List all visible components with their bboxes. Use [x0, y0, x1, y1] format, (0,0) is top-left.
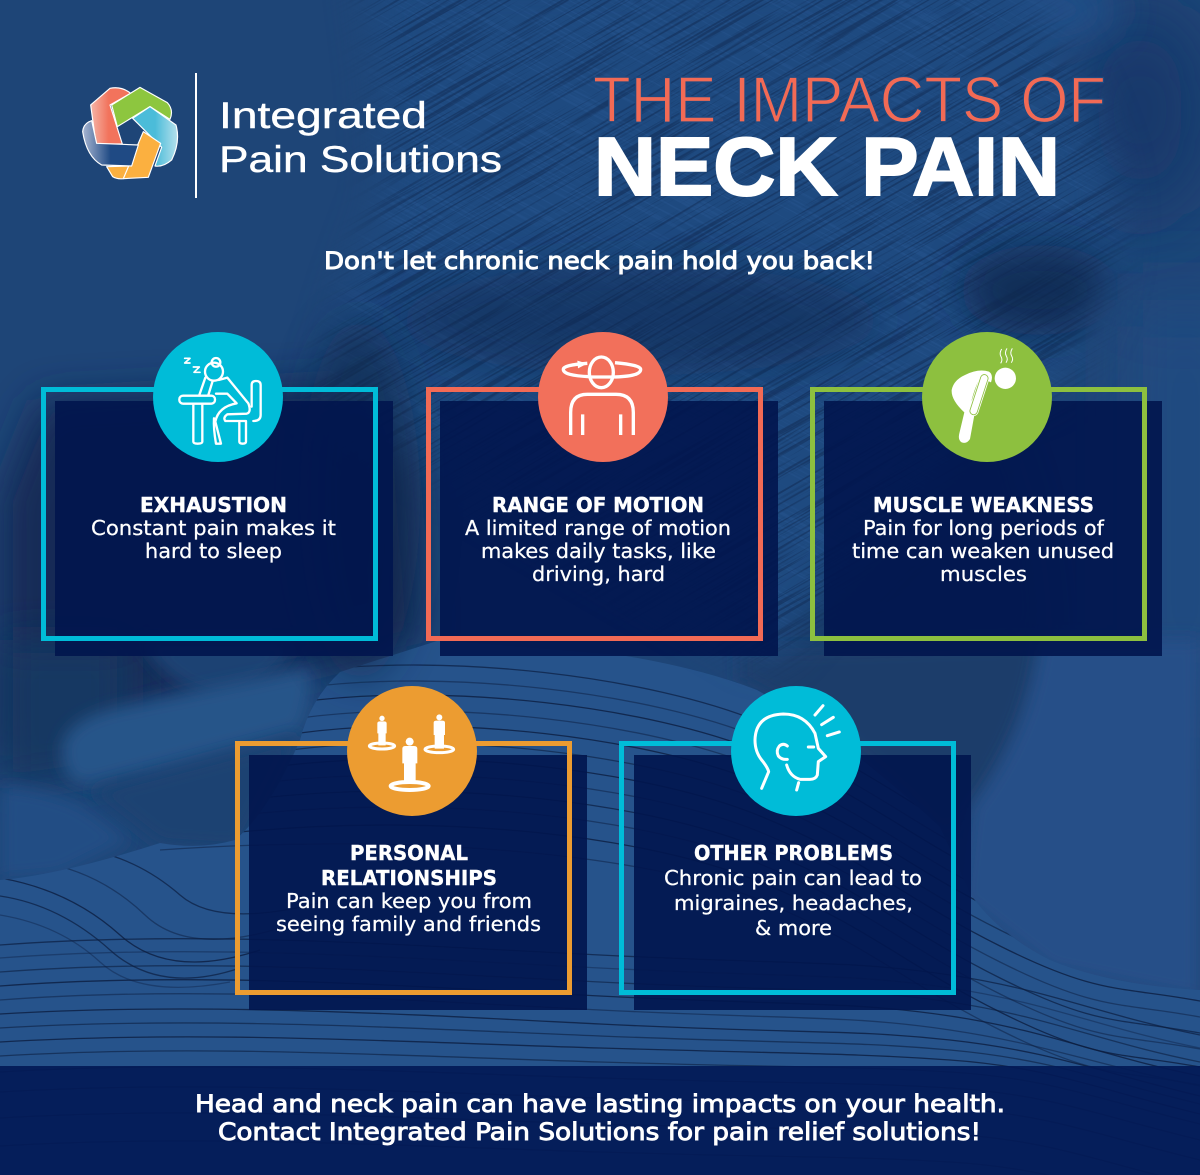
shirt — [0, 641, 1200, 1066]
icon: head with pain lines — [755, 706, 839, 790]
exhaustion text: hard to sleep — [145, 539, 282, 563]
muscle weakness text — [852, 493, 1114, 586]
icon: three people on rings — [369, 714, 454, 790]
panel: other problems — [622, 686, 971, 1010]
other problems text: & more — [755, 916, 832, 940]
title: NECK PAIN — [594, 120, 1060, 213]
logo wordmark — [219, 95, 502, 180]
personal relationships text — [276, 841, 541, 936]
icon: person asleep at desk — [179, 358, 261, 444]
other problems text — [664, 841, 922, 940]
range of motion text: driving, hard — [532, 562, 665, 586]
other problems text: OTHER PROBLEMS — [694, 841, 893, 865]
panel: range of motion — [428, 332, 778, 656]
subtitle: Don't let chronic neck pain hold you back! — [324, 247, 875, 275]
range of motion text: A limited range of motion — [465, 516, 731, 540]
icon: person bent over — [952, 348, 1016, 443]
logo wordmark: Integrated — [219, 95, 427, 136]
neck region — [760, 340, 1040, 650]
muscle weakness text: MUSCLE WEAKNESS — [873, 493, 1094, 517]
range of motion text: RANGE OF MOTION — [492, 493, 704, 517]
icon: person rotating head — [563, 357, 641, 435]
range of motion text — [465, 493, 731, 586]
title — [593, 63, 1106, 213]
bottom banner background — [0, 1066, 1200, 1175]
logo wordmark: Pain Solutions — [219, 139, 502, 180]
panel: muscle weakness — [812, 332, 1162, 656]
exhaustion text — [91, 493, 336, 563]
personal relationships text: PERSONAL — [350, 841, 468, 865]
muscle weakness text: muscles — [940, 562, 1027, 586]
panel: personal relationships — [238, 686, 587, 1010]
hand and forearm — [0, 380, 420, 760]
range of motion text: makes daily tasks, like — [481, 539, 716, 563]
other problems text: migraines, headaches, — [674, 891, 913, 915]
muscle weakness text: Pain for long periods of — [863, 516, 1105, 540]
title: THE IMPACTS OF — [593, 63, 1106, 136]
other problems text: Chronic pain can lead to — [664, 866, 922, 890]
logo: ribbon pentagon — [83, 87, 178, 179]
bottom banner text: Head and neck pain can have lasting impacts on your health. — [195, 1090, 1005, 1118]
panel: exhaustion — [44, 332, 393, 656]
muscle weakness text: time can weaken unused — [852, 539, 1114, 563]
hair — [324, 0, 1118, 658]
personal relationships text: seeing family and friends — [276, 912, 541, 936]
personal relationships text: RELATIONSHIPS — [321, 866, 497, 890]
logo divider — [195, 73, 197, 198]
bottom banner text — [195, 1090, 1005, 1146]
bottom banner text: Contact Integrated Pain Solutions for pain relief solutions! — [218, 1118, 981, 1146]
exhaustion text: EXHAUSTION — [140, 493, 287, 517]
personal relationships text: Pain can keep you from — [286, 889, 532, 913]
exhaustion text: Constant pain makes it — [91, 516, 336, 540]
